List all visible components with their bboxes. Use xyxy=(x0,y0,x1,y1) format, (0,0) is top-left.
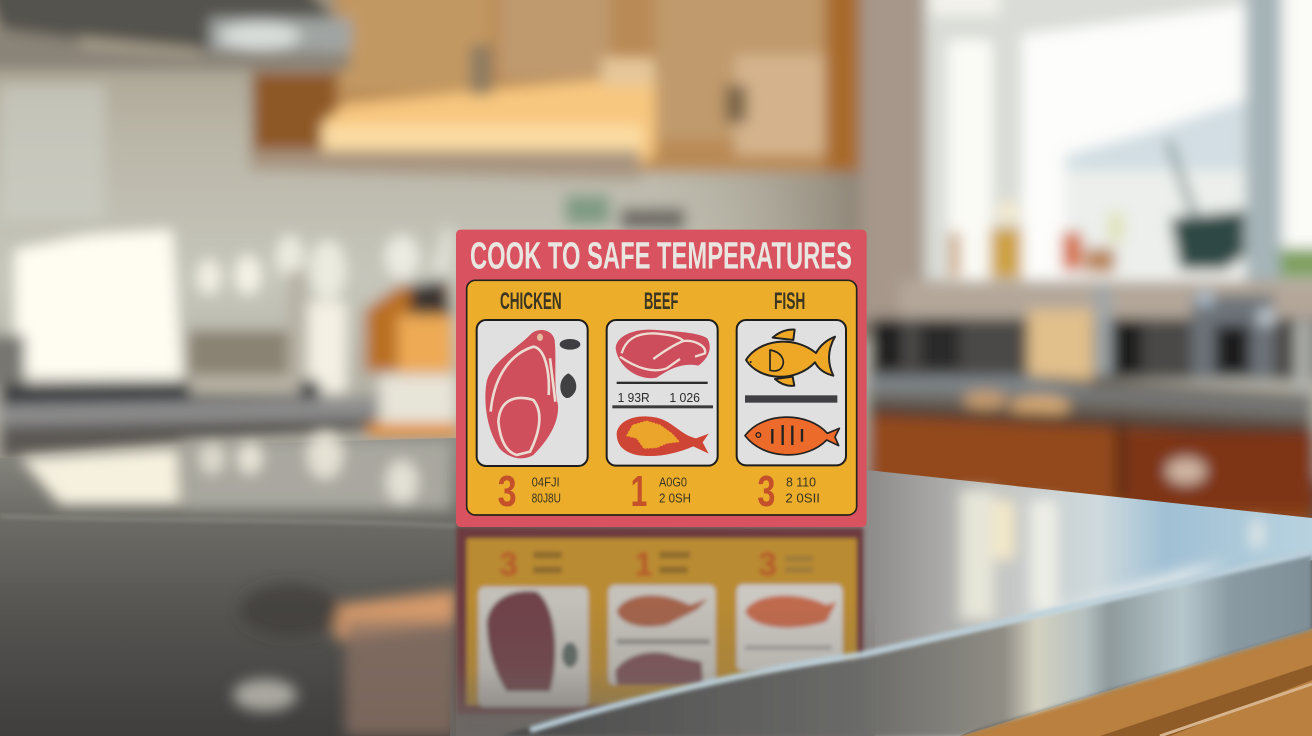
sink backsplash and faucets xyxy=(870,285,1312,395)
safety card xyxy=(456,230,867,527)
column: beef: 1 026 xyxy=(669,390,700,405)
icon: drumstick fish shape xyxy=(617,416,709,456)
fish heading: FISH xyxy=(774,288,805,315)
icon: steak xyxy=(616,330,710,378)
reflection fade xyxy=(450,600,875,736)
time row: chicken: 80J8U xyxy=(532,490,561,505)
time row: fish: 3 xyxy=(757,467,775,516)
far right counter and drawers xyxy=(868,375,1312,530)
reflected numerals xyxy=(499,547,777,584)
reflected numerals: 1 xyxy=(634,547,653,584)
yellow inner panel xyxy=(467,280,857,515)
column: fish xyxy=(737,288,846,465)
upper wood cabinets xyxy=(250,0,860,180)
card reflection on counter xyxy=(457,528,863,714)
beef tile xyxy=(607,320,718,466)
divider bar xyxy=(745,395,837,403)
icon: chicken cut xyxy=(485,330,558,458)
counter front edge and lower cabinet xyxy=(500,552,1312,736)
left appliances xyxy=(0,195,685,460)
icon: small dark heart xyxy=(560,373,576,398)
time row: chicken: 3 xyxy=(498,467,517,516)
time row: fish: 8 110 xyxy=(786,475,816,490)
time row: beef xyxy=(631,467,691,516)
time row: chicken: 04FJI xyxy=(532,475,560,490)
divider line bottom xyxy=(612,405,713,408)
icon: orange fish xyxy=(745,417,839,455)
divider line top xyxy=(617,382,708,384)
fish tile xyxy=(737,320,846,465)
icon: small dark organ xyxy=(560,339,580,350)
range hood xyxy=(0,0,352,70)
column: beef xyxy=(607,288,718,466)
time row: fish xyxy=(757,467,820,516)
card body xyxy=(456,230,867,527)
time row: fish: 2 0SII xyxy=(785,490,820,505)
reflected numerals: 3 xyxy=(758,547,777,584)
time row: beef: 2 0SH xyxy=(659,490,691,505)
chicken tile xyxy=(477,320,588,466)
column: chicken xyxy=(477,288,588,466)
steel countertop xyxy=(0,431,1312,736)
time row: chicken xyxy=(498,467,561,516)
reflected numerals: 3 xyxy=(499,547,518,584)
wall and window xyxy=(860,0,1312,320)
blurred background: wall and cabinets xyxy=(0,0,1312,530)
beef table text: 1 93R xyxy=(618,390,650,405)
time row: beef: 1 xyxy=(631,467,647,516)
chicken heading: CHICKEN xyxy=(500,288,562,315)
beef heading: BEEF xyxy=(644,288,678,315)
title: COOK TO SAFE TEMPERATURES xyxy=(470,235,852,277)
icon: yellow fish xyxy=(746,330,835,386)
time row: beef: A0G0 xyxy=(659,475,687,490)
